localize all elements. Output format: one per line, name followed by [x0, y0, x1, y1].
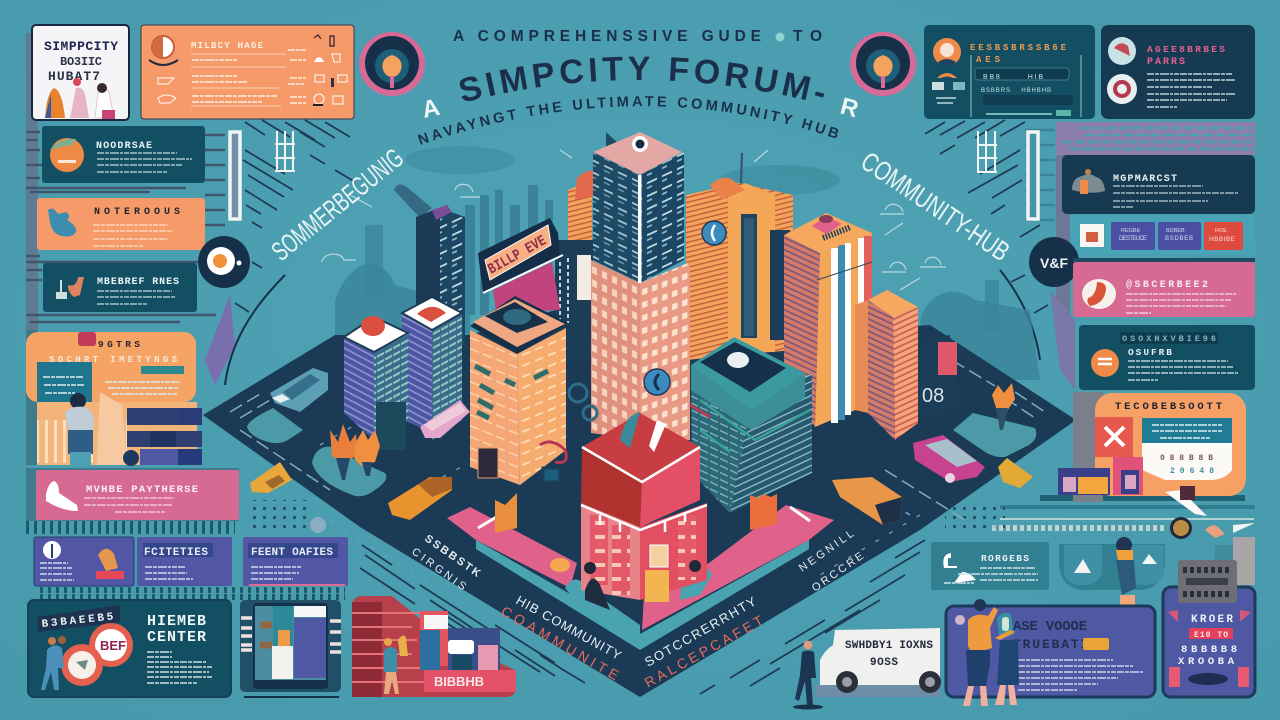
panel: teal messages: [43, 263, 197, 312]
panel: navy merchants: MGPMARCST: [1113, 174, 1177, 185]
orange back tower: [686, 153, 793, 360]
ground text: HIB COMMUNITY: [514, 593, 626, 664]
small striped tower: [855, 290, 918, 440]
panel: purple event offers: FEENT OAFIES: [251, 547, 333, 559]
vehicles and trees on the ground: [250, 368, 1033, 533]
ground text: [409, 527, 868, 691]
panel: white cover card: SIMPPCITY: [44, 39, 118, 54]
icon: right pink ring: [850, 32, 916, 96]
billboard: [478, 218, 563, 318]
ground text: RALCEPCAFET: [642, 611, 768, 691]
panel: teal roadmap: [931, 542, 1049, 590]
panel: purple event offers: [243, 537, 348, 586]
ground text: CIRGNIS: [409, 546, 470, 594]
icon: V&F circle: [1029, 237, 1079, 287]
icon: left pink ring: [359, 32, 425, 96]
panel: pink right: [1073, 258, 1255, 317]
dark tower right with number: 08: [922, 385, 944, 407]
dark tower right with number: [918, 335, 960, 420]
ground text: COAMMUNITE: [498, 603, 623, 684]
dark key grid: [123, 408, 202, 466]
panel: navy parks: AGEE8BRBES: [1147, 44, 1225, 55]
drones around the red building: [540, 384, 710, 482]
ground text: SOTCCRERRHTY: [642, 593, 760, 670]
main title: SIMPCITY FORUM-: [460, 56, 824, 101]
small feature cards: BDBEB: [1166, 228, 1185, 234]
curved side label right: COMMUNITY-HUB: [856, 146, 1015, 267]
pair of people: [963, 599, 1019, 706]
two people: [41, 636, 66, 690]
pre-title: A COMPREHENSSIVE GUDE: [453, 28, 761, 45]
panel: member center: B3BAEEB5: [41, 611, 114, 631]
panel: white cover card: BO3IIC: [60, 55, 102, 69]
distant skyline: [335, 146, 1040, 380]
panel: white cover card: HUBAT7: [48, 69, 100, 84]
peach building: [470, 296, 568, 485]
icon: orange panel badge: [149, 36, 178, 103]
white vertical pillars and ladders: [230, 131, 1038, 219]
panel: orange speech bubble: [1073, 392, 1246, 516]
panel: teal right info: OSOXHXVBIE96: [1122, 334, 1216, 344]
diagonal hatch dashes: [225, 120, 1048, 694]
panel: orange community story: SOCHRT IMETYNGS: [49, 355, 178, 365]
panel: red store block: BIBBHB: [434, 674, 484, 689]
panel: member center: BEF: [100, 638, 126, 653]
illustration: woman with device: [1116, 537, 1136, 640]
panel: purple badge with device: [1163, 560, 1255, 697]
panel: pink right: @SBCERBEE2: [1126, 279, 1208, 291]
small feature cards: DESTEUCE: [1119, 236, 1147, 242]
billboard: BILLP EVE: [485, 232, 549, 278]
panel: teal article: NOODRSAE: [96, 141, 152, 152]
panel: teal account top right: BSBBRS HBHBHB: [981, 88, 1051, 94]
panel: purple features: [137, 537, 232, 586]
panel: orange community story: 9GTRS: [98, 339, 140, 350]
ground text: SSBBSTK: [422, 533, 485, 581]
dotted strip and small icons: [310, 517, 1255, 539]
small feature cards: BSDBEB: [1165, 236, 1193, 242]
plaza: teal band and pink walkways: [447, 505, 834, 650]
panel: purple guide with people: [946, 599, 1155, 706]
panel: orange speech bubble: 20648: [1170, 467, 1214, 476]
icon: blue bubble lower: [644, 369, 670, 395]
panel: orange notes: NOTEROOUS: [94, 207, 180, 218]
panel: purple features: FCITETIES: [144, 547, 208, 559]
panel: navy parks: [1101, 25, 1255, 119]
panel: orange overview: [141, 25, 354, 119]
panel: orange notes: [37, 198, 205, 250]
panel: purple feature with icons: [34, 537, 134, 586]
illustration: van and person: 9OSS: [870, 657, 898, 669]
panel: pink feature banner: MVHBE PAYTHERSE: [86, 484, 198, 496]
panel: purple badge with device: E10 TO: [1194, 631, 1228, 640]
road islands: [247, 408, 303, 443]
panel: orange community story: [26, 332, 202, 466]
panel: teal article: [42, 126, 205, 183]
ground text: ORCCRE: [810, 549, 868, 594]
panel: white cover card: [32, 25, 129, 120]
person: [65, 393, 94, 466]
small feature cards: [1080, 222, 1243, 250]
panel: teal right info: OSUFRB: [1128, 347, 1172, 358]
panel: tablet: [240, 600, 341, 697]
panel: teal roadmap: RORGEBS: [981, 553, 1029, 564]
small cloud icons: [322, 150, 946, 290]
decorative background stripes behind side panels: [26, 33, 1255, 597]
small feature cards: REGBE: [1121, 228, 1141, 234]
white title letters: R: [837, 93, 861, 123]
panel: orange speech bubble: TECOBEBSOOTT: [1115, 401, 1222, 413]
panel: teal account top right: EESBSBRSSB6E: [970, 43, 1067, 53]
teal building: [691, 337, 812, 513]
icon: V&F circle: V&F: [1040, 255, 1068, 271]
white title letters: [420, 93, 861, 124]
small feature cards: HBBIBE: [1209, 236, 1236, 243]
city ground: [203, 300, 1076, 697]
small shops: [1058, 457, 1143, 495]
panel: member center: [28, 600, 231, 697]
panel: purple badge with device: 8BBBB8: [1181, 644, 1237, 656]
small feature cards: ROE: [1215, 228, 1227, 234]
back dark tower: [394, 184, 465, 345]
panel: teal right info: [1079, 325, 1255, 390]
back striped towers: [555, 171, 600, 360]
grey device: [1178, 560, 1237, 603]
subtitle: NAVAYNGT THE ULTIMATE COMMUNITY HUB: [418, 96, 838, 145]
panel: navy merchants: [1062, 155, 1255, 214]
panel: teal double arrows: [1059, 544, 1165, 590]
panel: member center: CENTER: [147, 629, 206, 646]
panel: teal account top right: [924, 25, 1095, 119]
curved side label left: SOMMERBEGUNIG: [266, 143, 409, 267]
ground text: NEGNILL: [797, 527, 858, 574]
panel: orange overview: MILBCY HAGE: [191, 41, 264, 51]
purple twin towers: [344, 297, 462, 450]
shopper: [384, 635, 408, 694]
panel: teal account top right: AES: [976, 55, 1001, 65]
panel: purple badge with device: KROER: [1191, 614, 1233, 626]
illustration: van and person: SWHDBY1 IOXNS: [845, 640, 933, 652]
panel: purple badge with device: XROOBA: [1178, 656, 1235, 668]
pre-title: TO: [793, 28, 822, 45]
panel: purple guide with people: TRUEBATIO: [1013, 637, 1098, 652]
left orange trees: [330, 424, 380, 480]
white title letters: A: [420, 94, 442, 124]
panel: member center: HIEMEB: [147, 613, 206, 630]
panel: navy parks: PARRS: [1147, 57, 1185, 68]
panel: purple guide with people: ASE VOOOE: [1013, 619, 1087, 635]
panel: teal account top right: BB8 HIB: [983, 74, 1043, 81]
panel: pink feature banner: [26, 468, 239, 521]
main central tower: [591, 126, 690, 440]
right-side icon cluster: [313, 35, 347, 106]
icon: blue bubble upper: [702, 221, 726, 245]
white striped tower: [784, 213, 872, 427]
icon: dark circle with egg: [198, 236, 250, 288]
panel: orange speech bubble: 088B8B: [1160, 454, 1213, 463]
panel: red store block: [352, 596, 516, 697]
panel: teal messages: MBEBREF RNES: [97, 277, 179, 288]
red building: [581, 412, 707, 610]
illustration: van and person: [793, 628, 941, 710]
